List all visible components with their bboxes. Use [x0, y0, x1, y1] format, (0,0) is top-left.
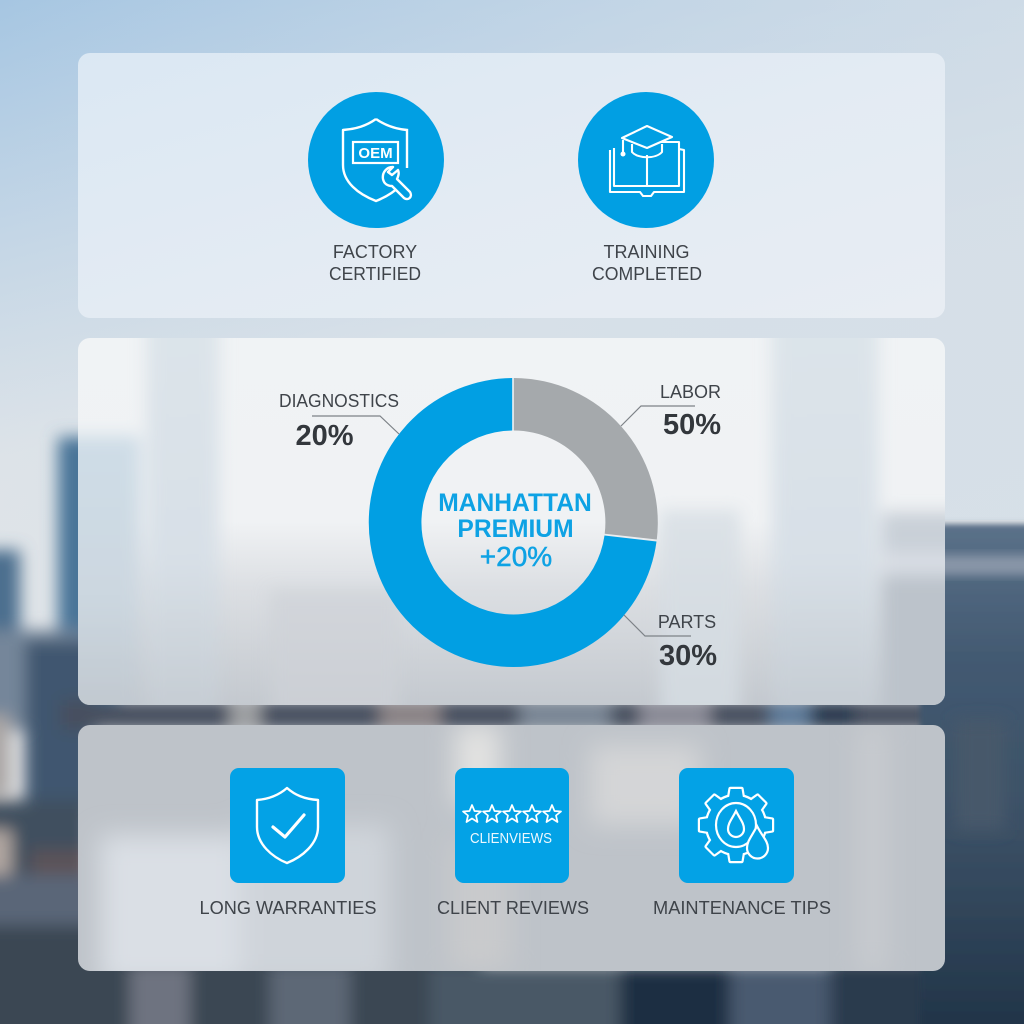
label: factory certified: FACTORY: [333, 242, 417, 262]
icon: graduation cap on book: [578, 92, 714, 228]
donut centre text: MANHATTAN: [438, 490, 592, 517]
label: client reviews: CLIENT REVIEWS: [437, 898, 589, 918]
callout: parts: PARTS: [658, 612, 716, 632]
icon: five stars and client reviews: CLIENVIEWS: [470, 830, 552, 847]
icon: OEM shield and wrench: OEM: [358, 145, 393, 162]
donut centre text: PREMIUM: [457, 516, 574, 543]
panel: price breakdown: [78, 338, 945, 705]
label: training completed: COMPLETED: [592, 264, 702, 284]
callout: parts: 30%: [659, 640, 717, 672]
panel: customer assurances: [78, 725, 945, 985]
icon: gear with oil drops: [679, 768, 794, 883]
callout: labor: [621, 382, 721, 441]
donut chart: [369, 378, 658, 667]
callout: parts: [624, 612, 717, 672]
callout: diagnostics: 20%: [295, 420, 354, 452]
icon: OEM shield and wrench: [308, 92, 444, 228]
label: training completed: TRAINING: [603, 242, 690, 262]
callout: diagnostics: [279, 391, 399, 452]
label: long warranties: LONG WARRANTIES: [200, 898, 376, 918]
callout: labor: 50%: [663, 409, 721, 441]
icon: shield with check: [230, 768, 345, 883]
label: maintenance tips: MAINTENANCE TIPS: [653, 898, 831, 918]
donut centre text: +20%: [480, 541, 552, 572]
callout: diagnostics: DIAGNOSTICS: [279, 391, 399, 411]
panel: certifications: [78, 53, 945, 318]
callout: labor: LABOR: [660, 382, 721, 402]
icon: five stars and client reviews: [455, 768, 569, 883]
label: factory certified: CERTIFIED: [329, 264, 421, 284]
